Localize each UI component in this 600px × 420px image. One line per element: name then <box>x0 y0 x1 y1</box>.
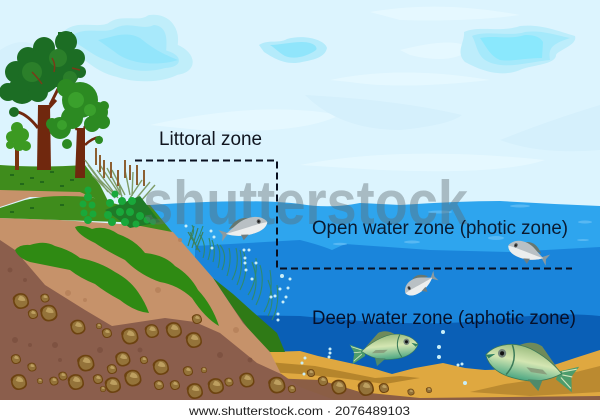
rocks <box>11 293 432 399</box>
fish: green large <box>481 334 582 398</box>
cloud: right <box>461 26 575 73</box>
label: open water zone: Open water zone (photic zone) <box>312 218 568 239</box>
littoral zone bracket <box>135 160 572 268</box>
cloud: small <box>259 37 327 63</box>
underwater plants <box>190 225 278 320</box>
water ripples <box>333 204 592 245</box>
cloud: large <box>66 20 188 76</box>
grass strip: upper <box>75 226 219 326</box>
underwater grass slope <box>213 278 285 352</box>
water: shallow layer <box>150 201 600 400</box>
leafy bush <box>80 186 160 228</box>
footer strip <box>0 400 600 420</box>
reeds <box>85 148 155 202</box>
tree: large <box>0 31 86 170</box>
footer text: www.shutterstock.com · 2076489103 <box>188 404 410 418</box>
hilltop grass <box>0 165 172 232</box>
ground: tan layer <box>0 218 281 374</box>
fish: grey upper right <box>505 235 552 271</box>
soil speckles <box>8 268 252 362</box>
upper soil path <box>0 190 100 207</box>
label: deep water zone: Deep water zone (aphotic zone) <box>312 308 576 329</box>
label: littoral zone: Littoral zone <box>159 129 262 150</box>
watermark: shutterstock <box>143 169 468 238</box>
water: middle layer <box>195 240 600 400</box>
fish: grey lower <box>401 268 441 301</box>
sand <box>268 350 600 400</box>
ground: brown soil <box>0 225 335 400</box>
tree: small left <box>6 122 31 170</box>
fish: grey upper left <box>217 211 270 247</box>
grass strip: lower <box>15 243 149 313</box>
bubbles <box>184 224 467 385</box>
shore tuft <box>188 226 203 252</box>
fish: green medium <box>349 328 420 368</box>
water: deep layer <box>230 314 600 400</box>
tree: front <box>46 79 110 178</box>
